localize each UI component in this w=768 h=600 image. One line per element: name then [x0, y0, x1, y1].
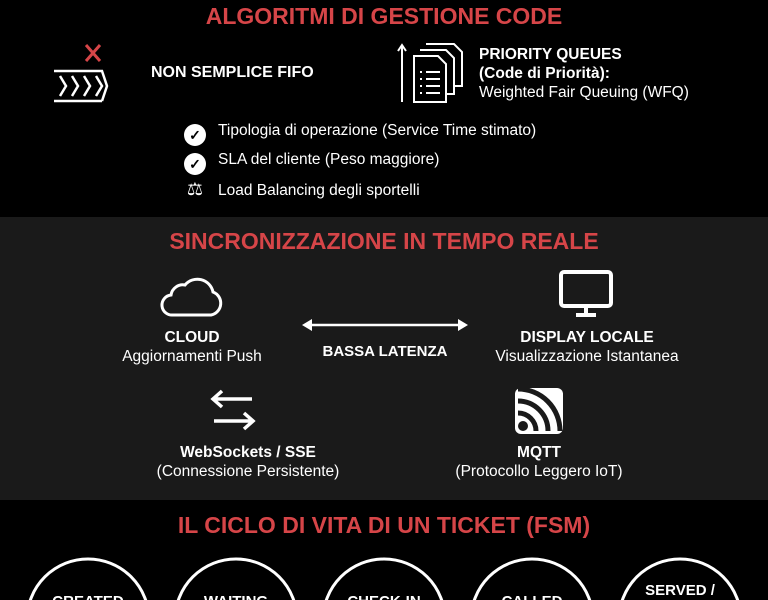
list: criteria: Load Balancing degli sportelli: [218, 182, 420, 199]
text: cloud: [122, 329, 262, 365]
text: priority queues: [479, 46, 689, 101]
title: sincronizzazione: SINCRONIZZAZIONE IN TEMPO REALE: [169, 228, 599, 254]
text: display locale: Visualizzazione Istantanea: [495, 348, 679, 365]
text: display locale: DISPLAY LOCALE: [520, 329, 654, 346]
text: priority queues: PRIORITY QUEUES: [479, 46, 622, 63]
icon: fifo crossed: [54, 44, 108, 102]
list: criteria: ✓: [189, 156, 201, 172]
text: non semplice fifo: NON SEMPLICE FIFO: [151, 64, 314, 81]
text: websockets: [157, 444, 339, 480]
text: cloud: Aggiornamenti Push: [122, 348, 262, 365]
icon: mqtt: [515, 388, 563, 434]
list: criteria: SLA del cliente (Peso maggiore): [218, 151, 439, 168]
text: bassa latenza: BASSA LATENZA: [322, 343, 448, 360]
title: ciclo di vita: IL CICLO DI VITA DI UN TICKET (FSM): [178, 512, 590, 538]
panel: sincronizzazione: [0, 217, 768, 500]
list: criteria: Tipologia di operazione (Service Time stimato): [218, 122, 536, 139]
text: priority queues: Weighted Fair Queuing (WFQ): [479, 84, 689, 101]
icon: cloud: [160, 278, 222, 316]
text: cloud: CLOUD: [164, 329, 220, 346]
arrow: bidirectional: [302, 319, 468, 331]
text: display locale: [495, 329, 679, 365]
list: criteria: ⚖: [187, 179, 203, 199]
icon: priority docs: [397, 43, 463, 103]
text: mqtt: MQTT: [517, 444, 561, 461]
title: algoritmi: ALGORITMI DI GESTIONE CODE: [206, 3, 562, 29]
text: mqtt: [455, 444, 623, 480]
icon: websocket arrows: [210, 390, 256, 430]
text: websockets: WebSockets / SSE: [180, 444, 316, 461]
text: mqtt: (Protocollo Leggero IoT): [455, 463, 623, 480]
diagram: fsm states: [28, 558, 740, 600]
text: priority queues: (Code di Priorità):: [479, 65, 610, 82]
list: criteria: [184, 122, 536, 199]
list: criteria: ✓: [189, 127, 201, 143]
text: websockets: (Connessione Persistente): [157, 463, 339, 480]
diagram: fsm states: SERVED /: [645, 582, 716, 599]
icon: monitor: [559, 270, 613, 317]
